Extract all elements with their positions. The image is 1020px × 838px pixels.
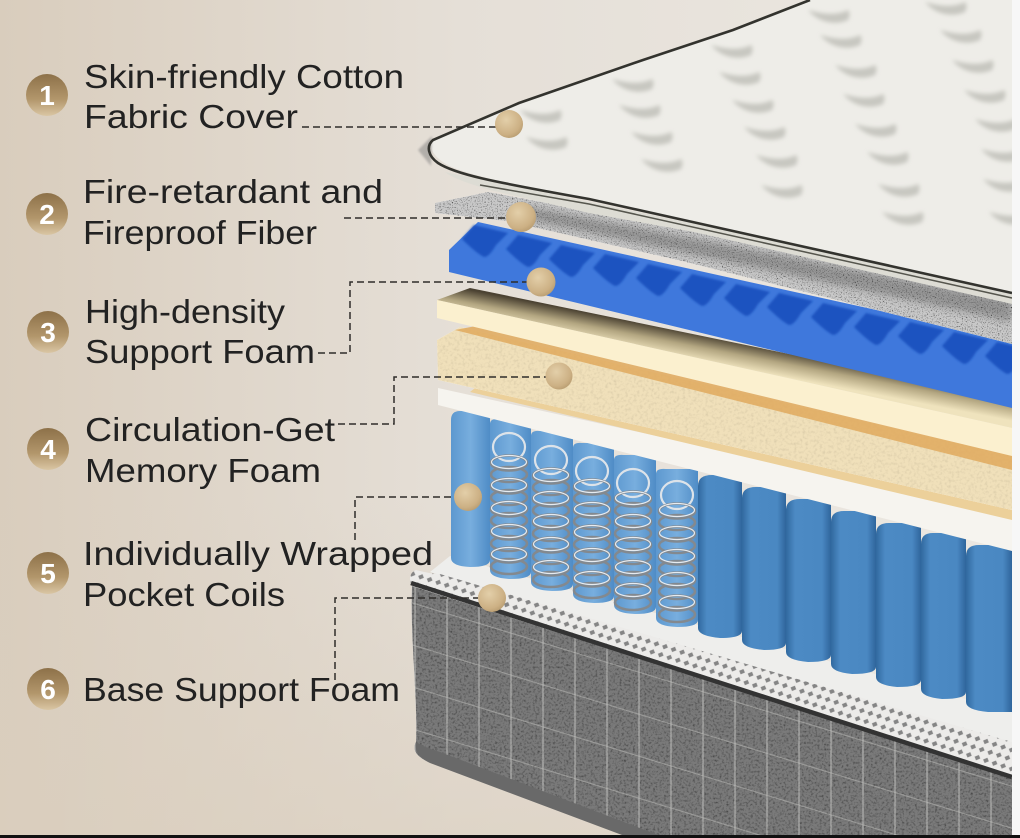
tufting dimples xyxy=(520,2,1020,225)
label 6: Base Support Foam xyxy=(83,671,400,708)
layer 2: fire-retardant fiber xyxy=(435,192,1012,344)
leader 6 xyxy=(335,598,478,680)
layer 6: base support foam xyxy=(410,556,1012,838)
dot 3 xyxy=(526,268,556,296)
item 6 xyxy=(27,668,400,710)
label 3: High-density xyxy=(85,293,286,330)
label 2: Fire-retardant and xyxy=(83,173,383,210)
item 5 xyxy=(27,535,433,613)
bottom edge strip xyxy=(0,835,1020,838)
item 4 xyxy=(27,411,335,489)
marker dots xyxy=(454,110,572,612)
label 4: Circulation-Get xyxy=(85,411,335,448)
left shadow xyxy=(418,136,432,166)
layer 3a: cream comfort foam xyxy=(437,288,1012,456)
exposed coil springs xyxy=(491,433,695,622)
label 1: Fabric Cover xyxy=(84,98,298,135)
badge 6: 6 xyxy=(40,674,56,705)
side band xyxy=(445,172,1012,304)
badge 5: 5 xyxy=(40,558,56,589)
right edge strip xyxy=(1012,0,1020,838)
label 2: Fireproof Fiber xyxy=(83,214,317,251)
pillow top xyxy=(431,0,1012,293)
white top layer of the base xyxy=(430,556,1012,750)
leader 3 xyxy=(318,282,527,353)
leader 4 xyxy=(338,377,546,424)
foam body xyxy=(437,327,1012,510)
badge 1: 1 xyxy=(39,80,55,111)
white foam layer above coils xyxy=(438,388,1012,551)
quilted side panel xyxy=(412,586,1012,838)
label 4: Memory Foam xyxy=(85,452,321,489)
badge 6 xyxy=(27,668,69,710)
badge 4: 4 xyxy=(40,434,56,465)
label 5: Pocket Coils xyxy=(83,576,285,613)
dot 1 xyxy=(495,110,523,138)
leader 2 xyxy=(344,217,507,219)
label 3: Support Foam xyxy=(85,333,315,370)
badge 2 xyxy=(26,193,68,235)
badge 1 xyxy=(26,74,68,116)
foam top edge xyxy=(455,326,1012,470)
shadowed top surface xyxy=(437,288,1012,428)
badge 3: 3 xyxy=(40,317,56,348)
label 5: Individually Wrapped xyxy=(83,535,433,572)
piping xyxy=(429,0,1012,293)
badge 2: 2 xyxy=(39,199,55,230)
item 2 xyxy=(26,173,383,251)
mesh border xyxy=(410,570,1012,778)
badge 5 xyxy=(27,552,69,594)
layer 1: cotton fabric cover xyxy=(418,0,1020,304)
leader 1 xyxy=(302,126,496,128)
label 1: Skin-friendly Cotton xyxy=(84,58,404,95)
layer 5: pocket coils xyxy=(451,411,1012,712)
layer 4: memory foam xyxy=(437,326,1012,520)
cream front strip xyxy=(437,300,1012,456)
bottom edge roll xyxy=(416,742,666,838)
dot 2 xyxy=(506,202,536,232)
badge 3 xyxy=(27,311,69,353)
orange underside sliver xyxy=(470,379,1012,520)
badge 4 xyxy=(27,428,69,470)
item 3 xyxy=(27,293,315,370)
item 1 xyxy=(26,58,404,135)
egg crate texture xyxy=(462,225,1020,374)
leader 5 xyxy=(355,497,455,540)
dot 5 xyxy=(454,483,482,511)
dot 6 xyxy=(478,584,506,612)
shadow cast by the cover xyxy=(520,205,1012,322)
layer 3: high-density blue foam xyxy=(449,222,1020,408)
dashed leader lines xyxy=(302,127,546,680)
dark piping xyxy=(411,583,1012,777)
plain pockets xyxy=(451,411,1012,712)
dot 4 xyxy=(546,362,572,390)
